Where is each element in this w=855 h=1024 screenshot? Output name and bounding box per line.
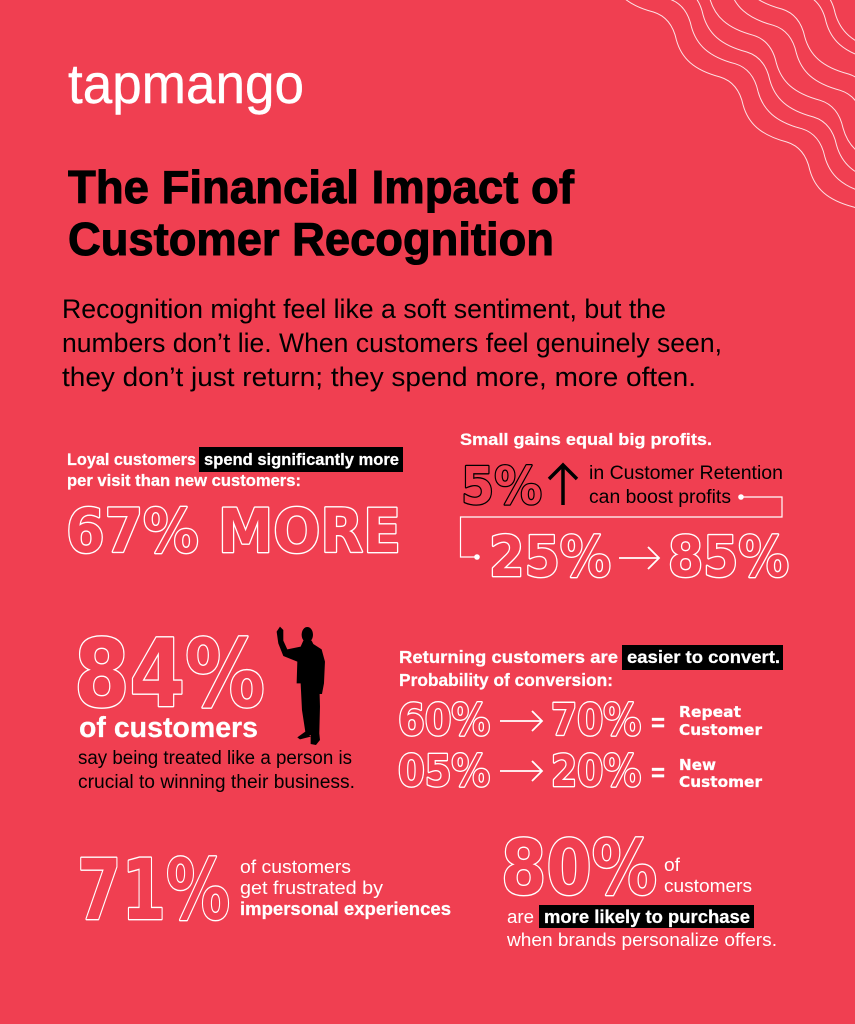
stat: 85%: 85% (668, 525, 789, 590)
text: more likely to purchase: more likely to purchase (544, 907, 750, 927)
icon: up arrow (549, 465, 577, 505)
text: frustrated: impersonal experiences (240, 899, 451, 919)
text: of customers: of customers (79, 712, 258, 744)
heading: small gains: Small gains equal big profits. (460, 430, 712, 449)
row: repeat customer: = (651, 710, 665, 737)
title: Customer Recognition (68, 213, 554, 265)
panel: loyal customers (66, 447, 403, 567)
intro paragraph: numbers don’t lie. When customers feel genuinely seen, (62, 328, 722, 358)
panel: 80% purchase (501, 823, 777, 950)
row: repeat customer: Customer (679, 721, 763, 739)
stat: 84%: 84% (74, 620, 265, 729)
panel: 71% frustrated (77, 841, 451, 939)
text: treated like a person (78, 748, 355, 793)
logo: tapmango: tapmango (68, 52, 304, 115)
heading: loyal customers: per visit than new customers: (67, 471, 301, 490)
intro paragraph: they don’t just return; they spend more, more often. (62, 362, 696, 392)
text: of customers: of (664, 855, 681, 875)
text: frustrated: of customers (240, 857, 351, 877)
connector line (460, 494, 782, 560)
heading: returning customers: Returning customers are (399, 647, 618, 667)
stat: 67% more: 67% MORE (66, 496, 401, 567)
text: more likely to purchase (506, 905, 777, 950)
text: of customers: customers (664, 876, 752, 896)
row: new customer: Customer (679, 773, 763, 791)
heading: loyal customers: spend significantly more (204, 450, 399, 469)
heading: returning customers: Probability of conversion: (399, 670, 613, 690)
icon: waving person silhouette (277, 627, 325, 745)
wave lines decoration (520, 0, 855, 272)
stat: 80%: 80% (501, 823, 657, 912)
heading: returning customers: easier to convert. (627, 647, 780, 667)
row: repeat customer (398, 695, 763, 746)
row: repeat customer: 60% (398, 695, 490, 746)
row: repeat customer: Repeat (679, 703, 741, 721)
title (68, 161, 575, 265)
panel: 84% of customers (74, 620, 355, 793)
text: of customers (664, 855, 752, 896)
text: treated like a person: say being treated like a person is (78, 748, 352, 769)
text: more likely to purchase: when brands personalize offers. (506, 930, 777, 950)
heading: loyal customers: Loyal customers (67, 450, 196, 469)
text: frustrated (240, 857, 451, 919)
stat: 25%: 25% (489, 525, 611, 590)
text: customer retention (589, 463, 783, 508)
row: repeat customer: 70% (551, 695, 641, 746)
row: new customer: = (651, 760, 665, 787)
title: The Financial Impact of (68, 161, 575, 213)
arrow (619, 547, 659, 569)
panel: returning customers (398, 645, 783, 797)
row: new customer: 05% (398, 746, 490, 797)
row: new customer: New (679, 756, 716, 774)
text: more likely to purchase: are (507, 907, 534, 927)
text: treated like a person: crucial to winning their business. (78, 772, 355, 793)
text: frustrated: get frustrated by (240, 878, 383, 898)
heading: loyal customers (67, 447, 403, 490)
intro paragraph (62, 294, 722, 392)
text: customer retention: can boost profits (589, 487, 731, 508)
text: customer retention: in Customer Retention (589, 463, 783, 484)
stat: 5%: 5% (461, 457, 542, 517)
stat: 71%: 71% (77, 841, 230, 939)
heading: returning customers (399, 645, 783, 690)
panel: small gains (460, 430, 789, 590)
row: new customer: 20% (551, 746, 641, 797)
intro paragraph: Recognition might feel like a soft sentiment, but the (62, 294, 666, 324)
row: new customer (398, 746, 763, 797)
